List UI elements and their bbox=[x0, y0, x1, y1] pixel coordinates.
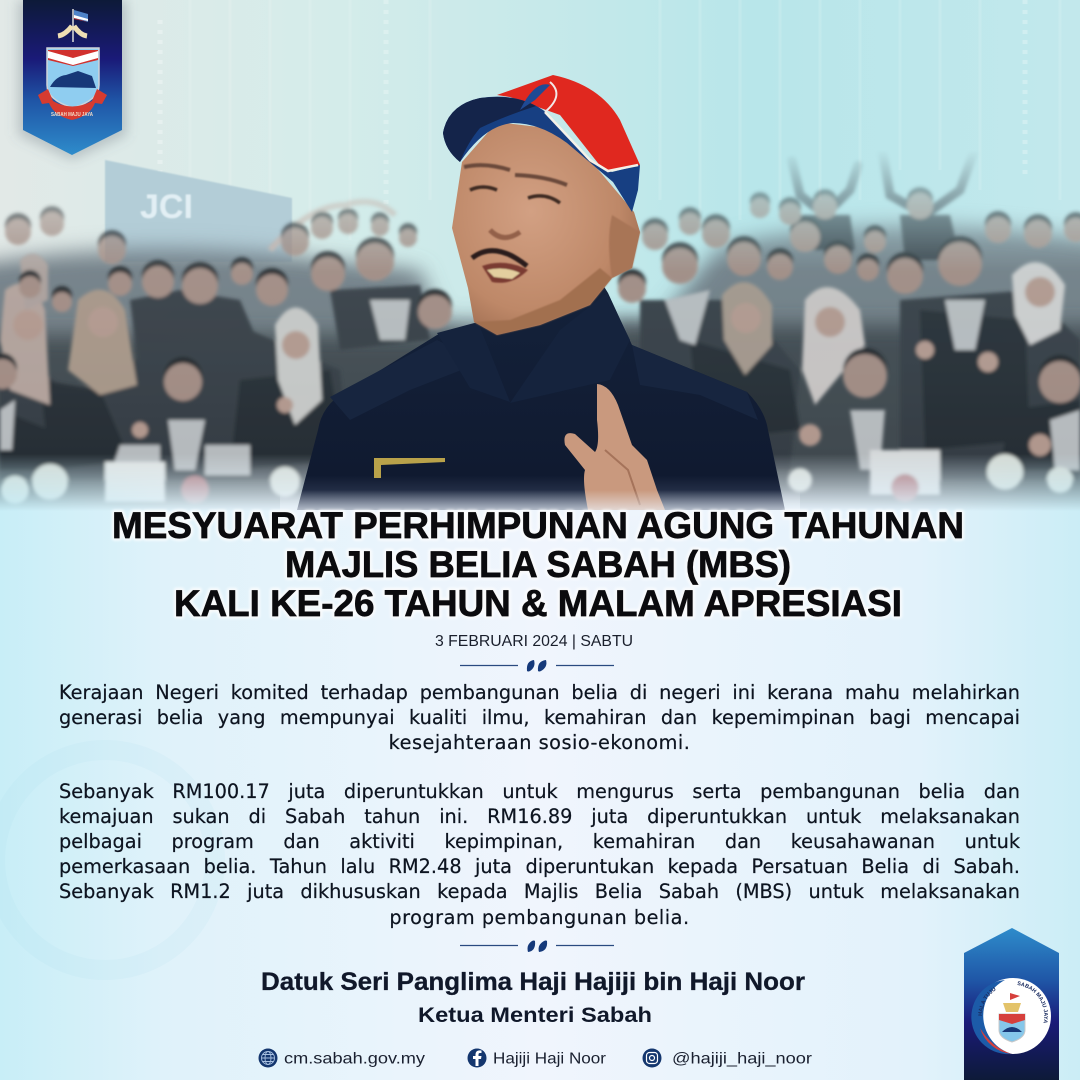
face bbox=[452, 122, 640, 335]
attribution role: Ketua Menteri Sabah bbox=[418, 1004, 652, 1027]
body text: commitment and allocation paragraphs: kemajuan sukan di Sabah tahun ini. RM16.89 juta diperuntukkan untuk melaksanakan bbox=[59, 805, 1020, 828]
raised arms bbox=[792, 148, 975, 215]
hair and faces bbox=[0, 185, 1080, 372]
closing quote divider bbox=[460, 940, 614, 952]
attribution name: Datuk Seri Panglima Haji Hajiji bin Haji Noor bbox=[261, 968, 805, 996]
title: KALI KE-26 TAHUN & MALAM APRESIASI bbox=[174, 583, 902, 624]
cap bbox=[497, 75, 640, 172]
body text: commitment and allocation paragraphs: program pembangunan belia. bbox=[389, 906, 690, 929]
footer: facebook: Hajiji Haji Noor bbox=[493, 1050, 607, 1068]
date line: 3 FEBRUARI 2024 | SABTU bbox=[435, 633, 633, 650]
eyes, brows, moustache and mouth bbox=[464, 165, 567, 283]
table flowers bbox=[1, 454, 1073, 504]
banner: Hala Tuju emblem bottom right bbox=[964, 928, 1059, 1080]
footer: website: cm.sabah.gov.my bbox=[284, 1050, 425, 1068]
opening quote divider bbox=[460, 660, 614, 672]
footer: instagram bbox=[642, 1048, 813, 1068]
JCI banner in backdrop: JCI bbox=[140, 188, 193, 226]
title: MESYUARAT PERHIMPUNAN AGUNG TAHUNAN bbox=[112, 505, 964, 546]
footer: facebook bbox=[468, 1048, 607, 1068]
banner: Hala Tuju emblem bottom right: HALA TUJU bbox=[978, 987, 996, 1016]
body text: commitment and allocation paragraphs: kesejahteraan sosio-ekonomi. bbox=[389, 731, 690, 754]
shirt bbox=[297, 280, 785, 510]
body text: commitment and allocation paragraphs: Sebanyak RM100.17 juta diperuntukkan untuk mengurus serta pembangunan belia dan bbox=[59, 780, 1020, 803]
title: KALI KE-26 TAHUN & MALAM APRESIASI bbox=[174, 583, 902, 624]
banner shadow bbox=[18, 0, 127, 160]
body text: commitment and allocation paragraphs: Sebanyak RM1.2 juta dikhususkan kepada Majlis Belia Sabah (MBS) untuk melaksanakan bbox=[59, 880, 1020, 903]
watermark: faint emblem ring bbox=[0, 750, 215, 970]
banner: Sabah state crest top left bbox=[23, 0, 122, 155]
photo: crowd of youth delegates bbox=[0, 148, 1080, 540]
title: MAJLIS BELIA SABAH (MBS) bbox=[285, 544, 791, 585]
photo: Chief Minister in red cap bbox=[297, 75, 785, 510]
JCI banner in backdrop bbox=[105, 160, 292, 262]
body text: commitment and allocation paragraphs: generasi belia yang mempunyai kualiti ilmu, kemahiran dan kepemimpinan bagi mencapai bbox=[59, 706, 1020, 729]
title: MAJLIS BELIA SABAH (MBS) bbox=[285, 544, 791, 585]
body text: commitment and allocation paragraphs: Kerajaan Negeri komited terhadap pembangunan belia di negeri ini kerana mahu melahirkan bbox=[59, 681, 1020, 704]
raised hand bbox=[564, 384, 665, 510]
suits bbox=[0, 215, 1080, 480]
shirts bbox=[0, 290, 1080, 495]
hijabs bbox=[0, 254, 1065, 425]
name tag bbox=[374, 458, 445, 478]
fade over figure base bbox=[280, 490, 800, 530]
title bbox=[112, 505, 964, 624]
motto: SABAH MAJU JAYA bbox=[51, 112, 93, 118]
body text: commitment and allocation paragraphs: pemerkasaan belia. Tahun lalu RM2.48 juta diperuntukan kepada Persatuan Belia di Sabah. bbox=[59, 855, 1020, 878]
banner: Hala Tuju emblem bottom right: SABAH MAJU JAYA bbox=[1017, 981, 1048, 1023]
footer: website bbox=[258, 1048, 425, 1068]
footer: instagram: @hajiji_haji_noor bbox=[672, 1050, 813, 1068]
body text: commitment and allocation paragraphs: pelbagai program dan aktiviti kepimpinan, kemahiran dan keusahawanan untuk bbox=[59, 830, 1020, 853]
title: MESYUARAT PERHIMPUNAN AGUNG TAHUNAN bbox=[112, 505, 964, 546]
body text: commitment and allocation paragraphs bbox=[59, 681, 1020, 929]
